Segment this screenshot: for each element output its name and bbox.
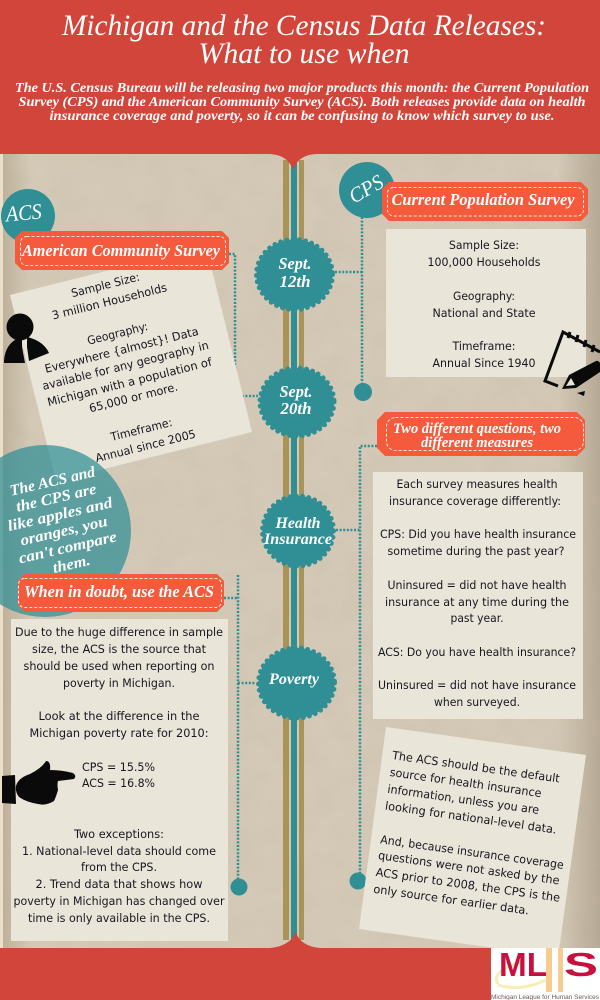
banner: Current Population Survey: Current Population Survey	[392, 190, 575, 209]
badge: ACS: ACS	[3, 198, 43, 227]
intro text: Survey (CPS) and the American Community Survey (ACS). Both releases provide data on health	[18, 95, 586, 110]
note: ACS facts: 3 million Households	[51, 280, 168, 322]
panel: when in doubt details: Look at the difference in the	[38, 709, 200, 723]
panel: CPS facts	[386, 229, 586, 377]
panel: when in doubt details: from the CPS.	[81, 860, 157, 874]
panel: when in doubt details: Due to the huge difference in sample	[15, 625, 223, 639]
timeline node: Sept. 12th: 12th	[280, 272, 310, 291]
panel: health insurance questions: Uninsured = did not have insurance	[378, 678, 576, 692]
panel: when in doubt details: should be used when reporting on	[24, 659, 214, 673]
panel: when in doubt details: CPS = 15.5%	[82, 760, 155, 774]
icon: pointing hand	[2, 761, 75, 805]
callout: apples and oranges: the CPS are	[14, 481, 98, 516]
timeline node: Sept. 20th: 20th	[280, 399, 312, 418]
banner: American Community Survey	[15, 231, 229, 270]
note: default source guidance: questions were not asked by the	[377, 848, 560, 887]
banner: Two different questions: different measures	[421, 435, 533, 451]
banner: Current Population Survey	[382, 182, 588, 221]
logo: Michigan League for Human Services: S	[564, 946, 598, 983]
panel: health insurance questions: sometime during the past year?	[388, 544, 564, 558]
panel: CPS facts: National and State	[432, 306, 536, 320]
timeline node: Poverty	[258, 648, 334, 718]
logo: Michigan League for Human Services	[491, 946, 600, 1000]
note: ACS facts: 65,000 or more.	[88, 380, 179, 415]
panel: health insurance questions: CPS: Did you have health insurance	[380, 527, 576, 541]
timeline node: Health Insurance: Health	[275, 515, 321, 532]
note: ACS facts: Annual since 2005	[94, 427, 197, 465]
callout: apples and oranges: oranges, you	[19, 513, 110, 550]
header banner	[0, 0, 600, 170]
timeline node: Sept. 20th: Sept.	[280, 382, 312, 401]
panel: health insurance questions: insurance at any time during the	[385, 595, 569, 609]
note: default source guidance: ACS prior to 2008, the CPS is the	[375, 865, 561, 905]
panel: health insurance questions	[373, 472, 583, 719]
panel: CPS facts: 100,000 Households	[428, 255, 540, 269]
panel: health insurance questions: ACS: Do you have health insurance?	[378, 645, 576, 659]
panel: when in doubt details: poverty in Michigan.	[63, 676, 175, 690]
icon: person	[4, 314, 49, 363]
timeline node: Sept. 12th	[256, 240, 332, 310]
note: default source guidance: And, because insurance coverage	[380, 832, 565, 872]
intro text: The U.S. Census Bureau will be releasing two major products this month: the Current Population	[15, 81, 589, 96]
panel: CPS facts: Timeframe:	[451, 339, 516, 353]
callout: apples and oranges: like apples and	[6, 494, 114, 535]
callout: apples and oranges: The ACS and	[8, 463, 97, 500]
note: default source guidance	[359, 727, 586, 957]
badge: ACS	[1, 189, 55, 243]
intro text	[15, 81, 589, 124]
banner: Two different questions: Two different questions, two	[393, 421, 561, 437]
panel: when in doubt details: ACS = 16.8%	[82, 776, 155, 790]
panel: health insurance questions: when surveyed.	[434, 695, 520, 709]
intro text: insurance coverage and poverty, so it can be confusing to know which survey to use.	[50, 109, 554, 124]
note: ACS facts: available for any geography in	[41, 338, 210, 393]
center timeline stripes	[283, 160, 304, 940]
timeline node: Health Insurance	[262, 496, 334, 566]
banner: When in doubt	[18, 574, 224, 612]
panel: when in doubt details: 1. National-level data should come	[22, 844, 216, 858]
panel: health insurance questions: Uninsured = did not have health	[388, 578, 566, 592]
callout: apples and oranges: can't compare	[17, 528, 118, 567]
panel: when in doubt details: 2. Trend data that shows how	[36, 877, 203, 891]
note: default source guidance: The ACS should be the default	[390, 748, 561, 786]
icon: notepad and pencil	[545, 332, 600, 396]
note: default source guidance: only source for earlier data.	[373, 882, 530, 918]
note: ACS facts: Timeframe:	[108, 415, 174, 444]
panel: health insurance questions: insurance coverage differently:	[389, 494, 561, 508]
title: Michigan and the Census Data Releases:	[61, 9, 546, 42]
panel: when in doubt details	[11, 619, 228, 941]
panel: CPS facts: Sample Size:	[449, 238, 519, 252]
panel: health insurance questions: Each survey measures health	[396, 477, 558, 491]
panel: CPS facts: Geography:	[453, 289, 515, 303]
note: default source guidance: looking for national-level data.	[384, 799, 558, 837]
note: ACS facts	[10, 246, 252, 481]
connector lines	[224, 217, 377, 880]
note: ACS facts: Michigan with a population of	[46, 355, 214, 409]
note: default source guidance: information, unless you are	[387, 782, 540, 817]
timeline node: Health Insurance: Insurance	[263, 531, 332, 548]
banner: American Community Survey: American Community Survey	[21, 241, 220, 260]
callout: apples and oranges	[0, 445, 131, 617]
panel: when in doubt details: poverty in Michigan has changed over	[14, 894, 225, 908]
callout: apples and oranges: them.	[51, 552, 92, 577]
logo: Michigan League for Human Services: ML	[499, 946, 547, 983]
badge: CPS	[339, 162, 395, 218]
panel: when in doubt details: Michigan poverty rate for 2010:	[30, 726, 209, 740]
timeline node: Poverty: Poverty	[268, 671, 320, 688]
panel: CPS facts: Annual Since 1940	[432, 356, 536, 370]
timeline node: Sept. 12th: Sept.	[278, 254, 312, 273]
panel: when in doubt details: size, the ACS is the source that	[32, 642, 206, 656]
title: What to use when	[198, 37, 410, 70]
panel: health insurance questions: past year.	[450, 611, 504, 625]
title	[61, 9, 546, 70]
note: default source guidance: source for health insurance	[389, 765, 542, 800]
footer band	[0, 932, 600, 1000]
note: ACS facts: Everywhere {almost}! Data	[43, 324, 200, 376]
panel: when in doubt details: time is only available in the CPS.	[28, 911, 210, 925]
panel: when in doubt details: Two exceptions:	[73, 827, 164, 841]
banner: Two different questions	[377, 412, 585, 456]
timeline node: Sept. 20th	[260, 368, 334, 436]
connector end dots	[230, 383, 372, 896]
note: ACS facts: Geography:	[86, 319, 149, 348]
note: ACS facts: Sample Size:	[70, 270, 141, 300]
banner: When in doubt: When in doubt, use the ACS	[24, 582, 214, 601]
badge: CPS: CPS	[344, 169, 388, 208]
